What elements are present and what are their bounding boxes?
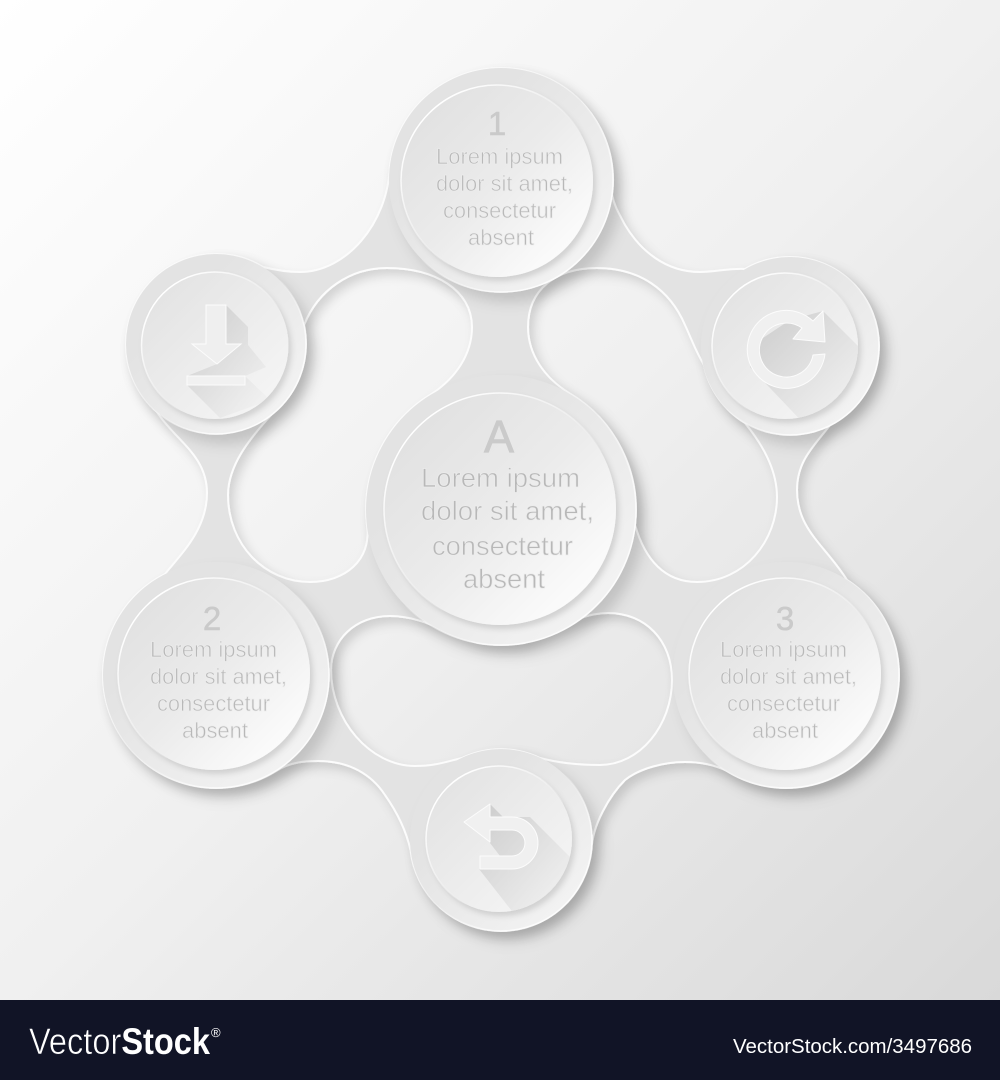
metaball network band with three holes <box>103 68 899 931</box>
footer bar <box>0 1000 1000 1080</box>
node 3: Lorem ipsum <box>720 637 847 662</box>
node: central A: absent <box>463 564 545 594</box>
node 3: consectetur <box>727 691 840 716</box>
node 3: 3 <box>776 600 794 637</box>
node: refresh icon <box>701 257 879 435</box>
node 1: 1 <box>488 105 506 142</box>
node: central A: dolor sit amet, <box>421 496 594 526</box>
logo: VectorStock <box>29 1021 210 1062</box>
node 2: dolor sit amet, <box>150 664 287 689</box>
node 2: Lorem ipsum <box>150 637 277 662</box>
node 3: dolor sit amet, <box>720 664 857 689</box>
node: central A: Lorem ipsum <box>421 463 580 493</box>
node 1: dolor sit amet, <box>436 171 573 196</box>
node: central A: consectetur <box>432 531 573 561</box>
node 2: 2 <box>203 600 221 637</box>
registered mark: ® <box>211 1025 221 1040</box>
node 1 <box>389 68 613 292</box>
image url: VectorStock.com/3497686 <box>733 1036 972 1058</box>
node 1: absent <box>468 225 534 250</box>
node 1: Lorem ipsum <box>436 144 563 169</box>
node: central A: A <box>484 411 514 462</box>
node 3: absent <box>752 718 818 743</box>
node 2: consectetur <box>157 691 270 716</box>
node 2 <box>103 562 329 788</box>
node: central A <box>366 375 636 645</box>
node: download icon <box>126 254 306 434</box>
node 3 <box>673 562 899 788</box>
node 1: consectetur <box>443 198 556 223</box>
node: back arrow icon <box>410 749 592 931</box>
node 2: absent <box>182 718 248 743</box>
